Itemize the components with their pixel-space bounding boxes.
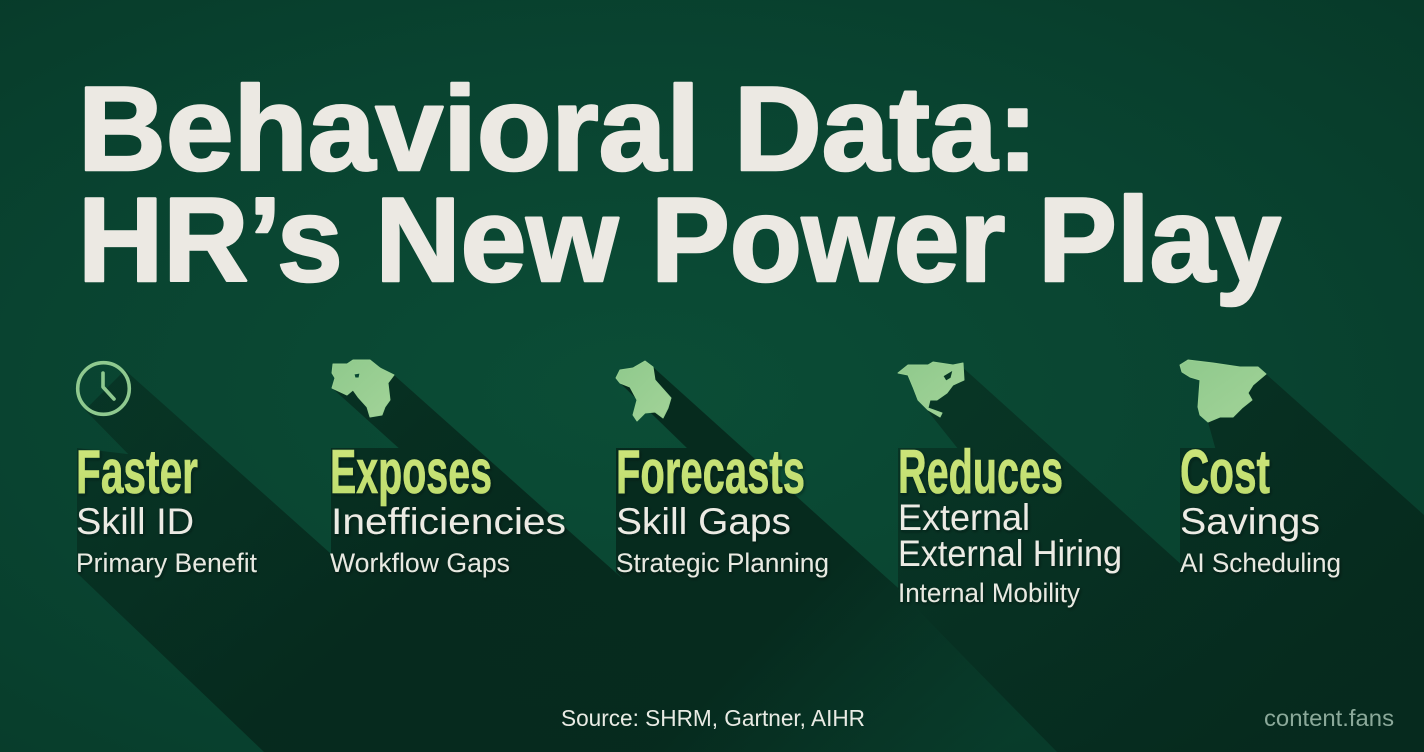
text: AI Scheduling: AI Scheduling bbox=[1180, 548, 1341, 578]
source line: Source: SHRM, Gartner, AIHR bbox=[561, 705, 865, 731]
column: Forecasts Skill Gaps bbox=[616, 361, 829, 578]
column: Reduces External Hiring bbox=[898, 362, 1122, 608]
long shadows: first three columns bbox=[77, 367, 1080, 752]
text: Primary Benefit: Primary Benefit bbox=[76, 548, 257, 578]
icon: clock bbox=[78, 363, 129, 414]
title: Behavioral Data: bbox=[78, 62, 1038, 196]
heading: Forecasts: Forecasts bbox=[616, 438, 805, 507]
text: Workflow Gaps: Workflow Gaps bbox=[330, 548, 510, 578]
title bbox=[78, 62, 1281, 307]
column: Cost Savings bbox=[1180, 360, 1341, 578]
icon: region map bbox=[332, 360, 394, 417]
heading: Cost: Cost bbox=[1180, 438, 1270, 507]
text: External Hiring: External Hiring bbox=[898, 533, 1122, 574]
text: Inefficiencies: Inefficiencies bbox=[331, 501, 566, 542]
column: Exposes Inefficiencies bbox=[330, 360, 566, 578]
heading: Exposes: Exposes bbox=[330, 438, 492, 507]
text: Internal Mobility: Internal Mobility bbox=[898, 578, 1080, 608]
text: External: External bbox=[898, 497, 1030, 538]
watermark: content.fans: content.fans bbox=[1264, 705, 1394, 731]
title: HR’s New Power Play bbox=[78, 173, 1281, 307]
text: Savings: Savings bbox=[1180, 501, 1320, 542]
icon: region map bbox=[616, 361, 671, 421]
text: Strategic Planning: Strategic Planning bbox=[616, 548, 829, 578]
heading: Faster: Faster bbox=[76, 438, 198, 507]
column: Faster Skill ID bbox=[76, 363, 257, 578]
icon: Spain map bbox=[1180, 360, 1266, 422]
long shadows: last two columns bbox=[898, 365, 1424, 752]
text: Skill ID: Skill ID bbox=[76, 501, 194, 542]
icon: North America map bbox=[898, 362, 964, 417]
text: Skill Gaps: Skill Gaps bbox=[616, 501, 791, 542]
heading: Reduces: Reduces bbox=[898, 438, 1063, 507]
